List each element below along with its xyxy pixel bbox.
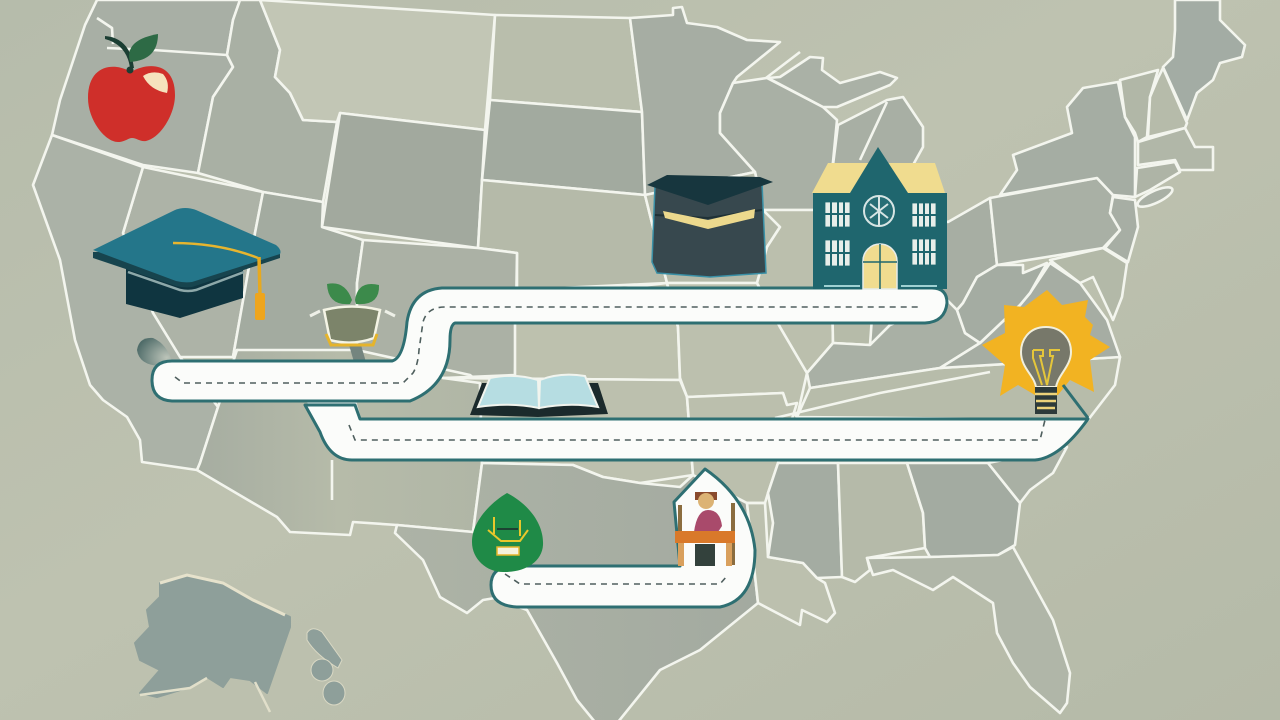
hawaii islands [307, 629, 345, 705]
icon: light bulb with sunburst [982, 290, 1110, 418]
icon: dark academic cap [647, 175, 773, 277]
dashed line on road 1 [175, 307, 920, 383]
stem of plant marker [349, 345, 366, 362]
icon: graduation cap [93, 208, 280, 320]
dashed line on road 3 [505, 574, 727, 584]
icon: school building [812, 147, 947, 289]
icon: student at desk [675, 492, 735, 566]
icon: apple [88, 34, 175, 142]
teardrop marker [137, 338, 172, 366]
icon: open book [470, 375, 608, 417]
road segment 2 [305, 405, 1088, 460]
alaska [135, 575, 290, 712]
icon: green leaf marker [472, 493, 543, 572]
road segment 3 [491, 469, 755, 607]
icon: plant in pot [310, 283, 395, 345]
dashed line on road 2 [349, 420, 1045, 440]
road segment 1 [152, 288, 947, 401]
lower road connector [306, 400, 362, 428]
